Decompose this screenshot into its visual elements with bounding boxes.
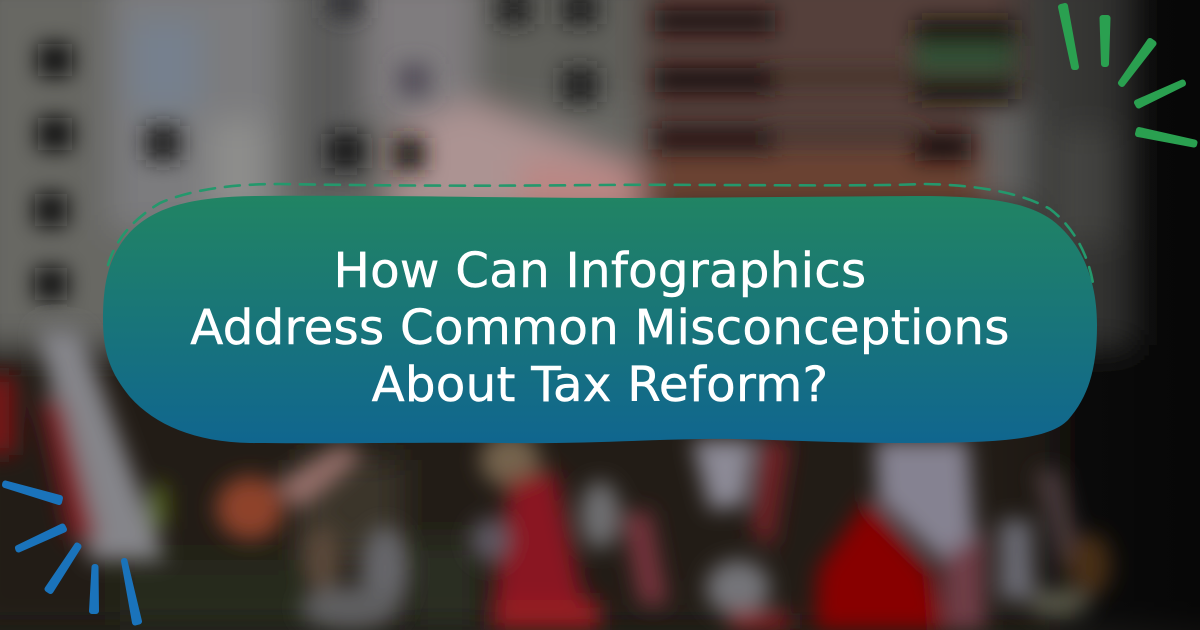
flags left: [38, 330, 165, 560]
icon: green burst rays top right: [1061, 6, 1194, 144]
buildings: [0, 0, 660, 350]
centre flags: [490, 470, 590, 630]
title: About Tax Reform?: [372, 357, 828, 413]
large red and white flag: [875, 440, 975, 565]
stripes: [655, 10, 775, 32]
title: How Can Infographics: [334, 243, 866, 299]
title panel: green to blue blob: [103, 196, 1097, 443]
title: Address Common Misconceptions: [190, 300, 1010, 356]
title: [190, 243, 1010, 413]
crowd figures: [216, 476, 284, 540]
lower dark crowd: [0, 345, 1200, 630]
dashed outline arc above panel: [108, 184, 1094, 290]
icon: blue burst rays bottom left: [5, 484, 139, 622]
windows: [38, 44, 72, 76]
